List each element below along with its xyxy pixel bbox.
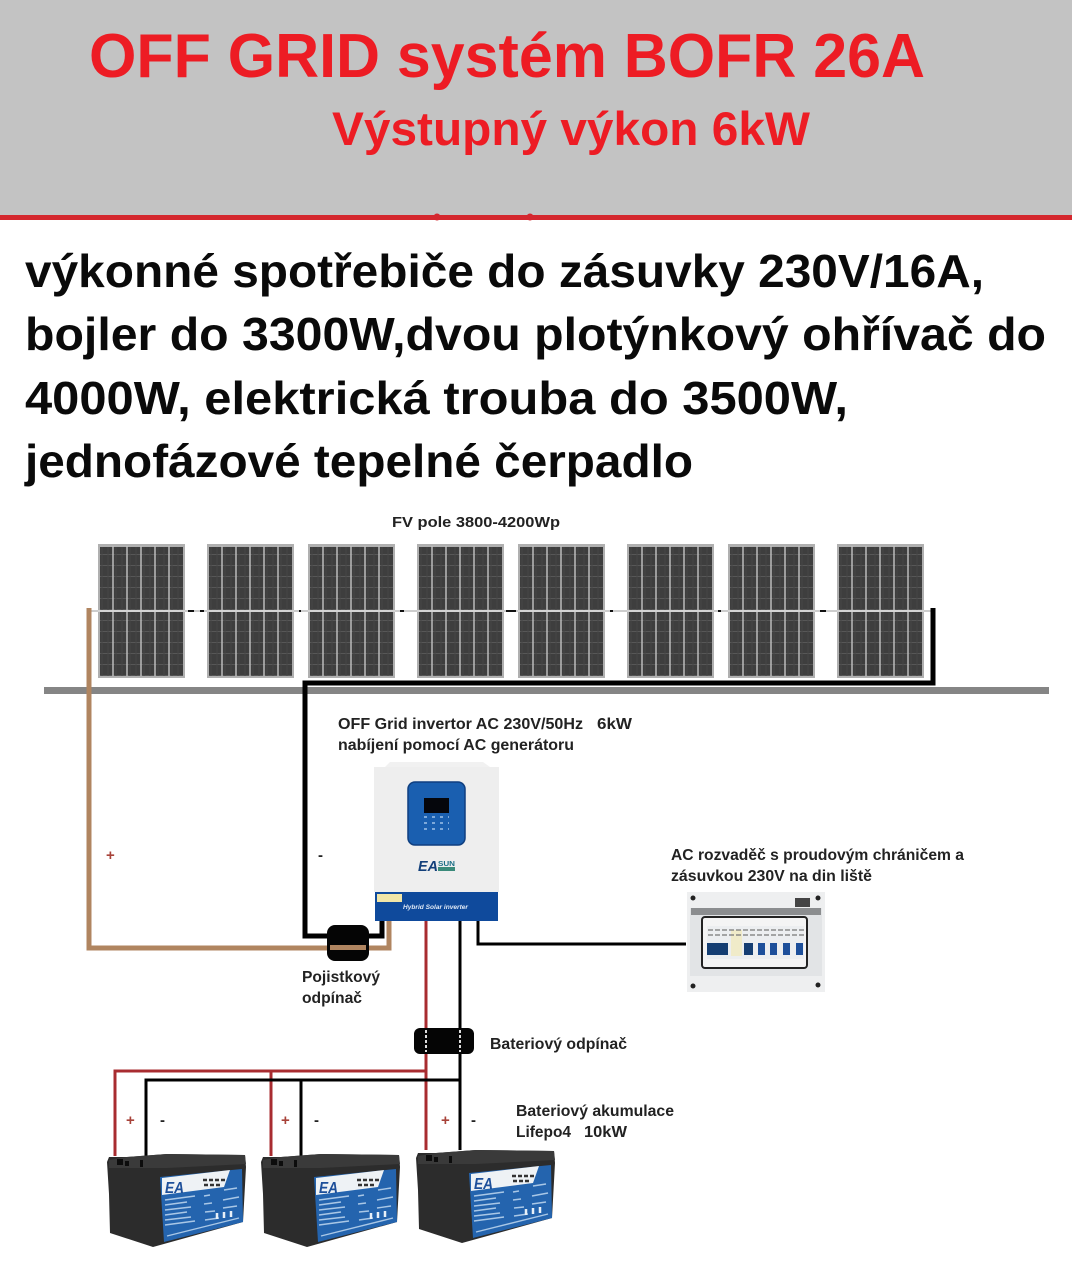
polarity marks: batteries: - [471, 1112, 476, 1129]
polarity marks: batteries: + [281, 1112, 290, 1129]
label: fuse disconnector: odpínač [302, 990, 362, 1007]
wire: inverter to AC distribution [478, 921, 686, 944]
description text: jednofázové tepelné čerpadlo [24, 435, 693, 487]
title: OFF GRID systém BOFR 26A [89, 22, 925, 91]
label: battery disconnector: Bateriový odpínač [490, 1036, 627, 1053]
description text: bojler do 3300W,dvou plotýnkový ohřívač do [25, 308, 1046, 360]
solar panel array [90, 544, 932, 678]
header band [0, 0, 1072, 220]
label: battery bank: 10kW [584, 1124, 627, 1141]
icon: hybrid inverter: SUN [438, 861, 455, 868]
label: inverter: nabíjení pomocí AC generátoru [338, 737, 574, 754]
polarity marks: batteries: - [314, 1112, 319, 1129]
label: AC distribution: AC rozvaděč s proudovým chráničem a [671, 847, 964, 864]
battery logo: EA [165, 1180, 184, 1197]
label: inverter: 6kW [597, 716, 632, 733]
icon: fuse disconnector [327, 925, 369, 961]
polarity marks: batteries: + [441, 1112, 450, 1129]
inverter logo: EA [418, 858, 438, 875]
polarity marks: batteries: - [160, 1112, 165, 1129]
icon: hybrid inverter [374, 762, 499, 921]
polarity marks: batteries: + [126, 1112, 135, 1129]
description text: 4000W, elektrická trouba do 3500W, [25, 372, 848, 424]
icon: AC distribution board [687, 892, 825, 992]
label: fuse disconnector [302, 969, 380, 1007]
wire: battery positive (red) [115, 921, 426, 1156]
icon: battery 1 [107, 1154, 246, 1247]
description text [24, 245, 1046, 487]
polarity marks: batteries [126, 1112, 476, 1129]
description text: výkonné spotřebiče do zásuvky 230V/16A, [25, 245, 984, 297]
mounting rail [44, 687, 1049, 694]
label: battery bank: Lifepo4 [516, 1124, 571, 1141]
icon: battery 2 [261, 1154, 400, 1247]
inverter model label: Hybrid Solar inverter [403, 904, 468, 911]
label: inverter: OFF Grid invertor AC 230V/50Hz [338, 716, 583, 733]
label: inverter [338, 716, 632, 754]
icon: battery disconnector [414, 1028, 474, 1054]
polarity marks: PV: - [318, 847, 323, 864]
wire: positive PV (brown) [89, 608, 389, 948]
battery logo: EA [474, 1176, 493, 1193]
polarity marks: PV: + [106, 847, 115, 864]
label: AC distribution [671, 847, 964, 885]
label: PV array: FV pole 3800-4200Wp [392, 514, 560, 531]
subtitle: Výstupný výkon 6kW [332, 102, 811, 155]
wire: battery negative (black) [146, 921, 460, 1156]
label: battery bank [516, 1103, 674, 1141]
label: battery bank: Bateriový akumulace [516, 1103, 674, 1120]
polarity marks: PV [106, 847, 323, 864]
label: fuse disconnector: Pojistkový [302, 969, 380, 986]
wire: negative PV (black) [305, 608, 933, 936]
label: AC distribution: zásuvkou 230V na din liště [671, 868, 872, 885]
icon: battery 3 [416, 1150, 555, 1243]
battery logo: EA [319, 1180, 338, 1197]
